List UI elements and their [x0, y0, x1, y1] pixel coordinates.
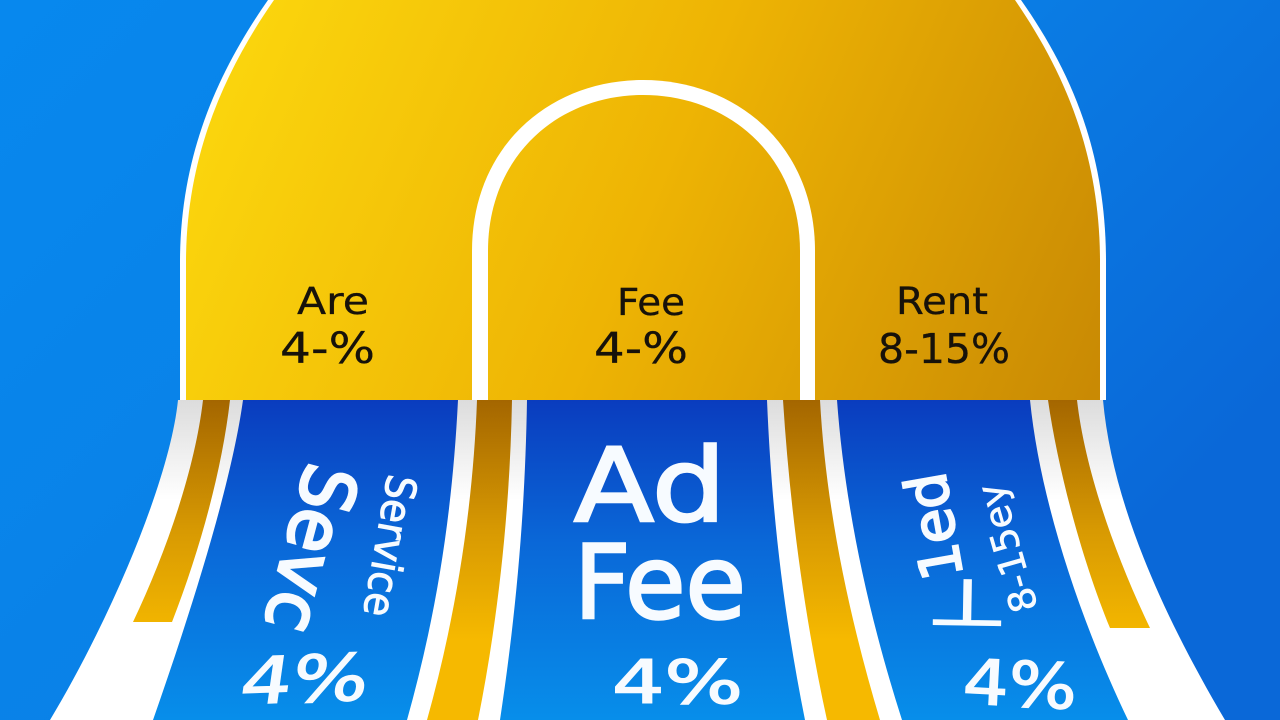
gold strip: far left	[133, 400, 230, 622]
panel heading: Ad: Ad	[574, 427, 726, 546]
panel heading fragment: ⊥	[926, 564, 1009, 641]
dome: gold roof	[186, 0, 1100, 400]
panel subheading: 8-15ey: 8-15ey	[969, 479, 1047, 617]
arch fill	[488, 95, 800, 400]
panel: fixed fee	[837, 400, 1128, 720]
dome label: Fee: 4-%	[594, 324, 688, 374]
gold strip: centre left	[427, 400, 512, 720]
panel background	[500, 400, 805, 720]
panel value: 4%: 4%	[236, 641, 374, 720]
dome label: Are: 4-%	[280, 324, 375, 374]
gold strip: far right	[1048, 400, 1150, 628]
dome label: Fee	[594, 281, 688, 374]
panel: service fee	[153, 400, 458, 720]
dome label: Are: Are	[297, 280, 369, 323]
panel: ad fee	[500, 400, 805, 720]
panel heading: Fee: Fee	[574, 524, 746, 643]
gold strip: centre right	[783, 400, 880, 720]
panel heading: 1ed: 1ed	[893, 468, 977, 585]
centre arch	[472, 80, 815, 400]
panel background	[153, 400, 458, 720]
dome label: Are	[280, 280, 375, 374]
arch outline	[472, 80, 815, 400]
dome label: Rent	[878, 280, 1010, 373]
panel value: 4%: 4%	[612, 648, 743, 718]
dome outline	[180, 0, 1106, 400]
dome label: Fee: Fee	[617, 281, 685, 324]
white flared base	[50, 400, 1225, 720]
dome label: Rent: 8-15%	[878, 325, 1010, 373]
panel heading: Sevc: Sevc	[247, 455, 374, 642]
dome label: Rent: Rent	[896, 280, 988, 323]
panel subheading: Service: Service	[353, 471, 426, 621]
panel background	[837, 400, 1128, 720]
